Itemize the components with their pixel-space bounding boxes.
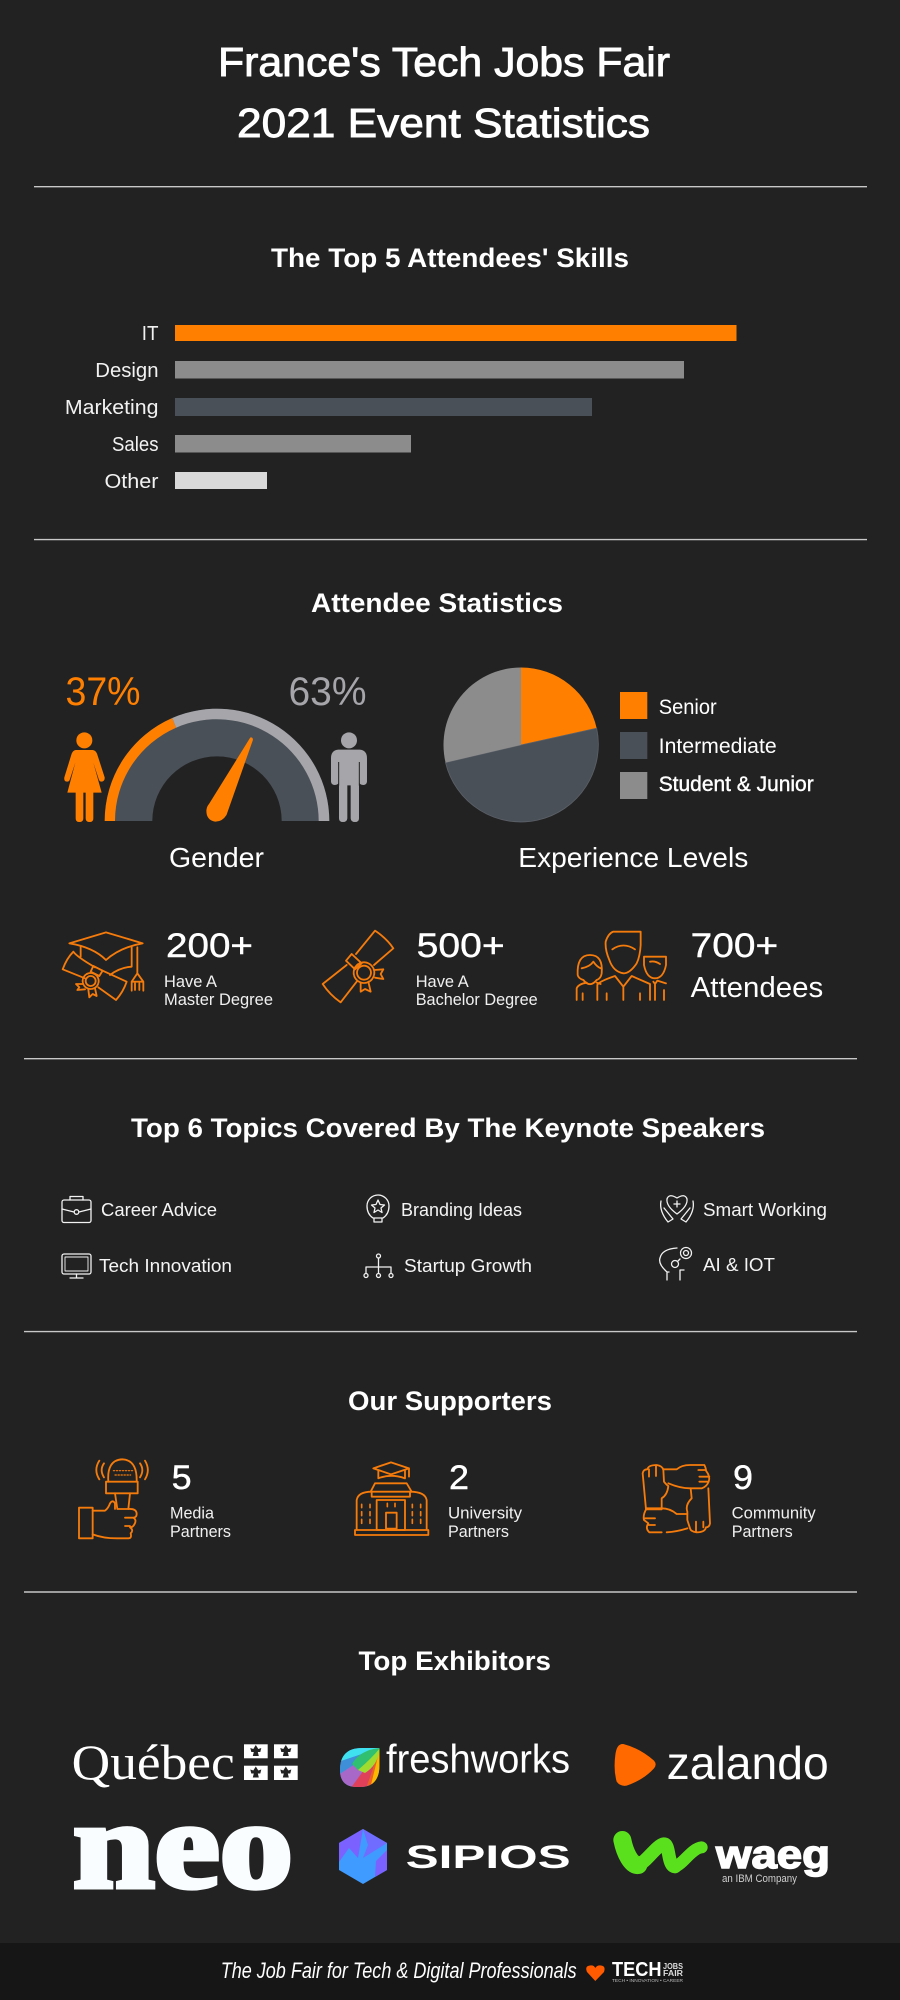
panel: top 5 skills xyxy=(65,243,736,493)
value: 5: 5 xyxy=(172,1459,192,1497)
value: 500+: 500+ xyxy=(417,927,505,965)
panel: top exhibitors xyxy=(74,1650,828,1891)
logo: freshworks: freshworks xyxy=(386,1738,570,1782)
legend: senior: Senior xyxy=(659,696,717,719)
caption: media partners: Media xyxy=(170,1505,215,1523)
logo: tech jobs fair: TECH • INNOVATION • CAREER xyxy=(612,1978,684,1983)
icon: people group xyxy=(577,932,666,1000)
heading: our supporters: Our Supporters xyxy=(348,1386,552,1416)
logo: sipios xyxy=(339,1829,571,1884)
caption: media partners: Partners xyxy=(170,1523,231,1541)
legend: senior xyxy=(620,692,717,719)
caption: have a master degree: Have A xyxy=(164,973,217,991)
stat: master degree xyxy=(63,927,273,1009)
stat: bachelor degree xyxy=(323,927,538,1009)
topic: career advice: Career Advice xyxy=(101,1199,217,1220)
heading: skills: The Top 5 Attendees' Skills xyxy=(271,243,629,273)
legend: intermediate: Intermediate xyxy=(659,735,777,758)
caption: have a bachelor degree: Have A xyxy=(416,973,469,991)
caption: university partners: University xyxy=(448,1505,523,1523)
logo: freshworks xyxy=(340,1744,569,1787)
logo: tech jobs fair: TECH xyxy=(612,1959,662,1981)
bar: Other: Other xyxy=(104,471,159,493)
icon: heart in hands xyxy=(661,1196,693,1222)
value: 200+: 200+ xyxy=(166,927,253,965)
legend: student and junior xyxy=(620,772,814,799)
gauge arcs xyxy=(105,709,329,821)
topic: startup growth xyxy=(364,1254,532,1278)
logo: zalando: zalando xyxy=(667,1737,829,1789)
topic: smart working: Smart Working xyxy=(703,1199,827,1220)
topic: career advice xyxy=(62,1196,217,1222)
panel: supporters xyxy=(79,1386,816,1541)
icon: diploma xyxy=(323,931,393,1002)
bar: IT xyxy=(142,323,737,345)
icon: light bulb with star xyxy=(367,1195,389,1222)
icon: university building xyxy=(355,1462,428,1535)
bar: Marketing: Marketing xyxy=(65,397,158,419)
caption: community partners xyxy=(732,1505,816,1541)
bar: Design: Design xyxy=(95,360,158,382)
stat: attendees xyxy=(577,927,823,1004)
topic: smart working xyxy=(661,1196,827,1222)
icon: graduation cap and diploma xyxy=(63,932,143,1000)
pie slice: student and junior xyxy=(444,668,521,763)
bar: Sales xyxy=(112,434,411,456)
bar: Design xyxy=(95,360,684,382)
topic: tech innovation xyxy=(62,1254,232,1278)
caption: community partners: Partners xyxy=(732,1523,793,1541)
icon: monitor xyxy=(62,1254,91,1278)
value: 2: 2 xyxy=(449,1459,469,1497)
icon: org chart xyxy=(364,1254,393,1278)
gauge needle xyxy=(206,737,253,822)
caption: have a master degree: Master Degree xyxy=(164,991,273,1009)
supporter: community partners xyxy=(643,1459,816,1541)
topic: startup growth: Startup Growth xyxy=(404,1255,532,1276)
footer tagline: The Job Fair for Tech & Digital Professionals xyxy=(221,1958,577,1983)
bar chart: skills xyxy=(65,323,736,493)
topic: tech innovation: Tech Innovation xyxy=(99,1255,232,1276)
icon: hand with microphone xyxy=(79,1459,148,1538)
value: 9: 9 xyxy=(733,1459,753,1497)
bar: IT: IT xyxy=(142,323,158,345)
supporter: university partners xyxy=(355,1459,523,1541)
icon: man xyxy=(331,732,367,822)
value: 700+: 700+ xyxy=(691,927,778,965)
footer xyxy=(0,1943,900,2000)
topic: branding ideas: Branding Ideas xyxy=(401,1199,522,1220)
panel: attendee statistics xyxy=(63,588,823,1009)
bar: Marketing xyxy=(65,397,592,419)
logo: quebec xyxy=(72,1734,298,1790)
topic: branding ideas xyxy=(367,1195,522,1222)
icon: head with gears xyxy=(660,1248,692,1280)
caption: attendees: Attendees xyxy=(691,972,823,1004)
logo: waeg: waeg xyxy=(715,1833,830,1877)
gender gauge xyxy=(64,670,367,873)
bar: Other xyxy=(104,471,267,493)
topic: ai and iot: AI & IOT xyxy=(703,1254,775,1275)
logo: waeg xyxy=(622,1833,830,1885)
icon: woman xyxy=(64,732,105,822)
logo: neo: neo xyxy=(73,1777,293,1914)
label: 37%: 37% xyxy=(66,670,140,714)
label: Gender: Gender xyxy=(169,842,264,873)
caption: community partners: Community xyxy=(732,1505,816,1523)
heading: top exhibitors: Top Exhibitors xyxy=(358,1646,551,1676)
supporter: media partners xyxy=(79,1459,231,1541)
legend: intermediate xyxy=(620,732,777,759)
label: 63%: 63% xyxy=(288,670,366,714)
icon: four linked hands xyxy=(643,1465,710,1532)
caption: have a master degree xyxy=(164,973,273,1009)
caption: have a bachelor degree xyxy=(416,973,538,1009)
title xyxy=(218,39,670,146)
icon: briefcase xyxy=(62,1196,91,1222)
logo: tech jobs fair xyxy=(612,1959,684,1983)
caption: university partners: Partners xyxy=(448,1523,509,1541)
heading: keynote topics: Top 6 Topics Covered By The Keynote Speakers xyxy=(131,1113,765,1143)
label: experience levels: Experience Levels xyxy=(518,842,748,873)
logo: tech jobs fair: JOBS xyxy=(663,1962,684,1971)
logo: waeg: an IBM Company xyxy=(722,1873,797,1885)
topic: ai and iot xyxy=(660,1248,775,1280)
caption: university partners xyxy=(448,1505,523,1541)
heading: attendee statistics: Attendee Statistics xyxy=(311,588,563,618)
logo: tech jobs fair: FAIR xyxy=(663,1969,683,1978)
bar: Sales: Sales xyxy=(112,434,158,456)
logo: sipios: SIPIOS xyxy=(406,1839,571,1875)
panel: keynote topics xyxy=(62,1113,827,1280)
icon: heart xyxy=(586,1965,605,1981)
title: France's Tech Jobs Fair xyxy=(218,39,670,85)
caption: have a bachelor degree: Bachelor Degree xyxy=(416,991,538,1009)
experience levels pie chart xyxy=(444,668,814,873)
title: 2021 Event Statistics xyxy=(237,100,650,146)
pie slice: intermediate xyxy=(446,728,598,822)
legend: student and junior: Student & Junior xyxy=(659,773,814,796)
logo: quebec: Québec xyxy=(72,1734,235,1790)
pie slice: senior xyxy=(521,668,597,745)
caption: media partners xyxy=(170,1505,231,1541)
